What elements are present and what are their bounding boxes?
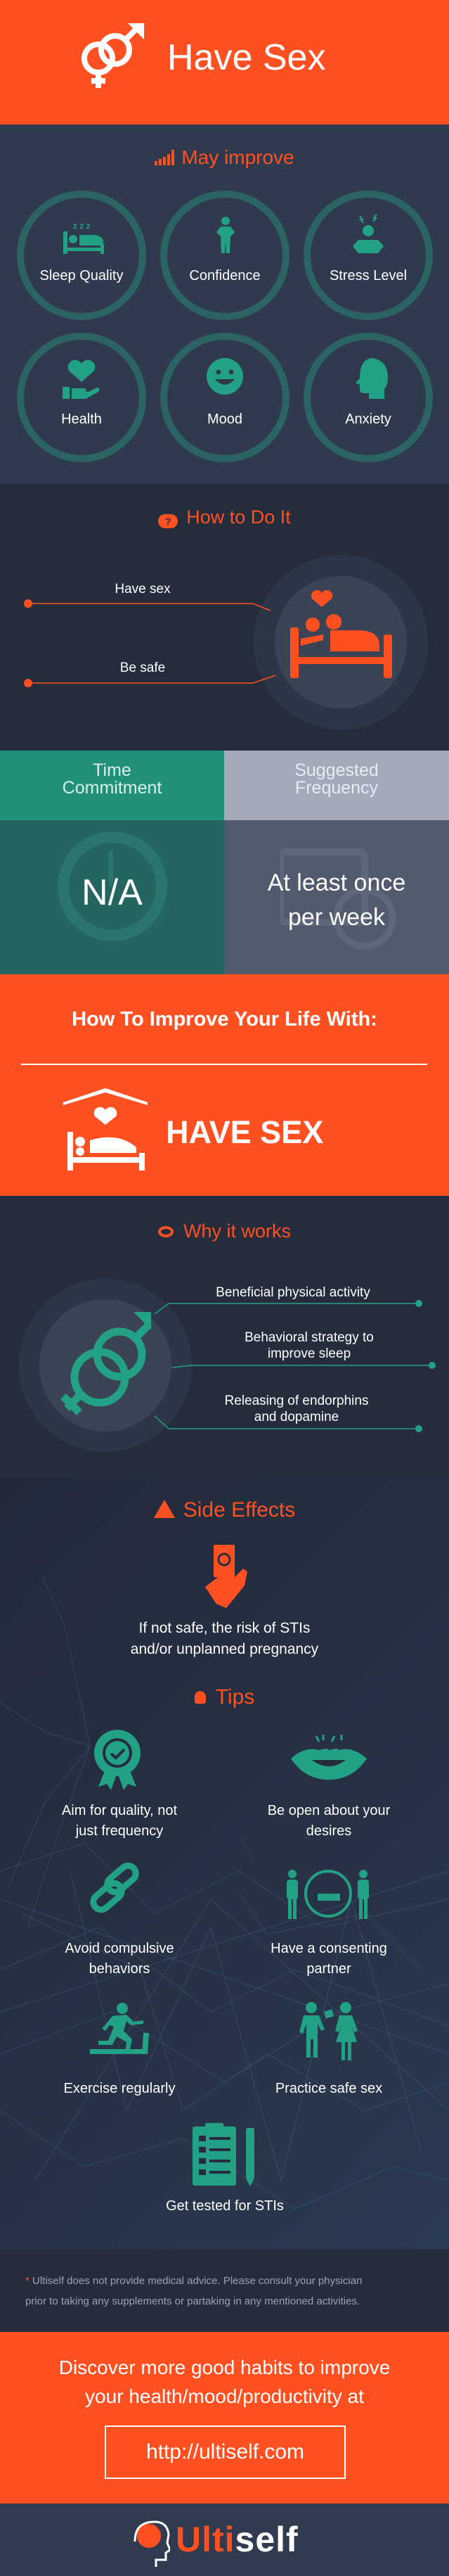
heading: how to do it: How to Do It (186, 506, 291, 528)
benefit circles: Confidence (189, 268, 261, 283)
heading: side effects: Side Effects (183, 1498, 295, 1522)
tips icons (62, 1730, 391, 2214)
benefit circles: Anxiety (345, 412, 391, 427)
tips icons: Practice safe sex (275, 2081, 382, 2096)
panel: time commitment: Time (93, 760, 131, 780)
benefit circles: Mood (207, 412, 242, 427)
tips icons: desires (306, 1823, 351, 1839)
steps diagram (24, 555, 428, 729)
heading: why it works: Why it works (183, 1220, 291, 1242)
panel: may improve (0, 125, 449, 484)
panel: how to improve banner (0, 974, 449, 1196)
heading: tips (195, 1685, 254, 1709)
url button: http://ultiself.com (146, 2440, 304, 2463)
heading: may improve: May improve (181, 146, 294, 168)
reasons diagram: Releasing of endorphins (225, 1394, 368, 1408)
url button (105, 2425, 346, 2479)
disclaimer (0, 2249, 449, 2332)
icon: badge (94, 1730, 141, 1790)
icon: clipboard (193, 2123, 254, 2186)
panel: side effects and tips (0, 1477, 449, 2249)
icon: treadmill runner (90, 2003, 149, 2054)
icon: hand with condom (205, 1545, 247, 1608)
title: Have Sex (167, 37, 325, 78)
footer logo (0, 2504, 449, 2576)
banner heading: How To Improve Your Life With: (72, 1008, 377, 1031)
tips icons: Be open about your (268, 1803, 391, 1818)
benefit circles (17, 191, 433, 462)
reasons diagram: Behavioral strategy to (245, 1330, 374, 1345)
tips icons: partner (306, 1961, 351, 1977)
value: frequency: At least once (268, 869, 405, 896)
benefit circles: Sleep Quality (40, 268, 123, 283)
panel: suggested frequency (224, 751, 449, 974)
panel: why it works (0, 1196, 449, 1477)
icon: confidence (216, 217, 235, 253)
icon: anxiety (356, 358, 388, 399)
icon: couple safe sex (299, 2002, 358, 2060)
tips icons: Aim for quality, not (62, 1803, 178, 1818)
tips icons: Avoid compulsive (65, 1941, 174, 1956)
icon: intertwined symbols (63, 1325, 149, 1413)
disclaimer: prior to taking any supplements or partaking in any mentioned activities. (25, 2295, 360, 2307)
icon: gender symbols (82, 23, 144, 88)
cta text: your health/mood/productivity at (85, 2385, 364, 2407)
text: side effect: If not safe, the risk of STIs (139, 1620, 310, 1636)
text: side effect: and/or unplanned pregnancy (131, 1641, 318, 1657)
icon: health (63, 360, 100, 399)
call to action panel (0, 2332, 449, 2504)
tips icons: Exercise regularly (64, 2081, 175, 2096)
reasons diagram: Beneficial physical activity (216, 1285, 370, 1300)
value: N/A: N/A (82, 872, 143, 913)
panel: how to do it (0, 484, 449, 751)
tips icons: just frequency (75, 1823, 163, 1839)
icon: house bed (63, 1088, 148, 1171)
value: frequency: per week (288, 904, 385, 931)
heading: tips: Tips (216, 1685, 254, 1709)
panel: time commitment: Commitment (63, 778, 162, 798)
icon: mood (207, 358, 243, 395)
reasons diagram: and dopamine (254, 1410, 339, 1424)
icon: stress (353, 215, 384, 253)
panel: time commitment (0, 751, 224, 974)
banner title: HAVE SEX (166, 1114, 323, 1150)
reasons diagram: improve sleep (268, 1346, 351, 1361)
icon: sleep: z z z (73, 221, 91, 231)
tips icons: Get tested for STIs (166, 2198, 284, 2214)
icon: sleep (63, 221, 104, 254)
tips icons: behaviors (89, 1961, 150, 1977)
benefit circles: Health (61, 412, 102, 427)
icon: brain head (134, 2521, 170, 2567)
steps diagram: Be safe (120, 661, 165, 675)
reasons diagram (19, 1279, 436, 1452)
steps diagram: Have sex (115, 582, 171, 597)
header panel (0, 0, 449, 125)
cta text: Discover more good habits to improve (59, 2357, 390, 2378)
icon: bed with couple (290, 590, 392, 678)
cta text (59, 2357, 390, 2407)
benefit circles: Stress Level (330, 268, 407, 283)
background network (0, 1577, 449, 2209)
disclaimer: * Ultiself does not provide medical advice. Please consult your physician (25, 2275, 362, 2287)
panel: suggested frequency: Suggested (294, 760, 379, 780)
icon: chain (90, 1863, 139, 1913)
value: frequency (267, 869, 405, 931)
panel: suggested frequency: Frequency (295, 778, 378, 798)
logo text: Ultiself (176, 2520, 299, 2559)
heading: how to do it: ? (165, 516, 171, 527)
tips icons: Have a consenting (271, 1941, 387, 1956)
icon: consenting partners (287, 1870, 369, 1919)
icon: lips (291, 1735, 367, 1780)
text: side effect (131, 1620, 319, 1657)
